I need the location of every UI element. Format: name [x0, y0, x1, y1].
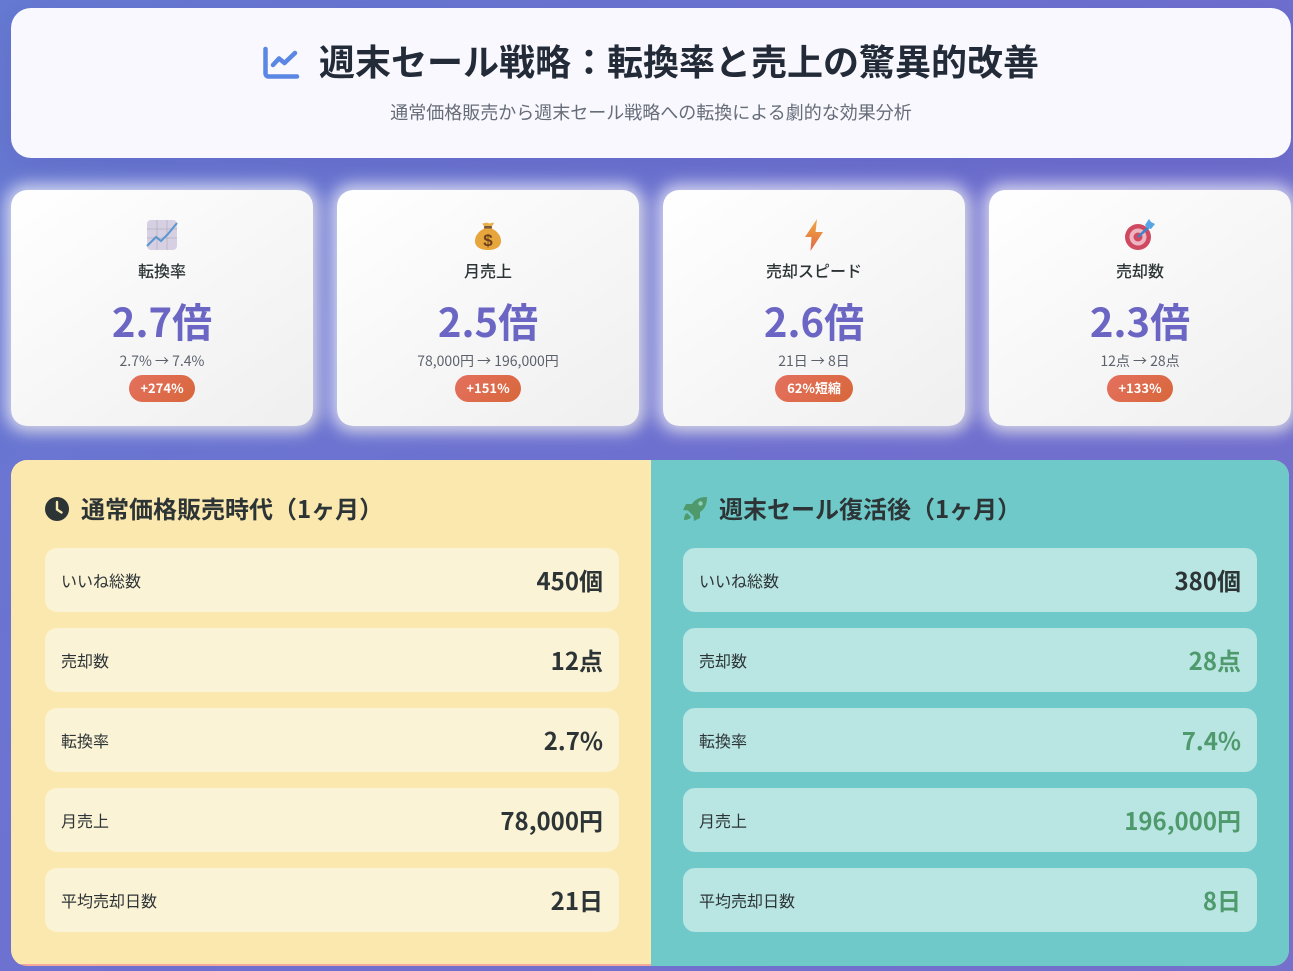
row: likes: いいね総数 [699, 568, 779, 592]
value: 2.5倍 [438, 291, 538, 349]
detail: 21日 → 8日 [778, 351, 850, 371]
row: likes: 380個 [1175, 562, 1241, 597]
icon: money bag: $ [483, 231, 493, 250]
label: 売却数 [1116, 258, 1164, 282]
icon: line chart [263, 46, 300, 79]
badge: 62%短縮 [787, 378, 841, 397]
value: 2.3倍 [1090, 291, 1190, 349]
badge: +274% [140, 378, 184, 397]
value: 2.6倍 [764, 291, 864, 349]
row: conversion rate: 2.7% [544, 722, 603, 757]
badge [775, 375, 853, 402]
row: monthly sales: 78,000円 [500, 802, 603, 837]
value: 2.7倍 [112, 291, 212, 349]
row: average days: 平均売却日数 [699, 888, 795, 912]
KPI card: conversion rate [11, 190, 313, 426]
title: 週末セール戦略：転換率と売上の驚異的改善 [319, 34, 1039, 86]
detail: 78,000円 → 196,000円 [417, 351, 559, 371]
row: likes [683, 548, 1257, 612]
row: conversion rate: 転換率 [699, 728, 747, 752]
icon: money bag [475, 222, 501, 250]
comparison panels [11, 460, 1289, 966]
icon: chart emoji [146, 220, 178, 250]
row: units sold: 12点 [551, 642, 603, 677]
row: average days: 21日 [551, 882, 603, 917]
label: 売却スピード [766, 258, 862, 282]
row: monthly sales: 月売上 [699, 808, 747, 832]
row: units sold [683, 628, 1257, 692]
row: units sold: 売却数 [61, 648, 109, 672]
subtitle: 通常価格販売から週末セール戦略への転換による劇的な効果分析 [390, 99, 912, 125]
row: monthly sales: 月売上 [61, 808, 109, 832]
row: average days [45, 868, 619, 932]
row: average days: 平均売却日数 [61, 888, 157, 912]
row: units sold: 28点 [1189, 642, 1241, 677]
badge [129, 375, 195, 402]
panel: after weekend sale [651, 460, 1289, 966]
panel: regular price era [11, 460, 651, 964]
row: monthly sales [45, 788, 619, 852]
label: 転換率 [138, 258, 186, 282]
row: conversion rate: 7.4% [1182, 722, 1241, 757]
row: likes: いいね総数 [61, 568, 141, 592]
row: conversion rate: 転換率 [61, 728, 109, 752]
header panel [11, 8, 1291, 158]
row: monthly sales [683, 788, 1257, 852]
row: conversion rate [45, 708, 619, 772]
label: 月売上 [464, 258, 512, 282]
badge: +151% [466, 378, 510, 397]
row: average days: 8日 [1203, 882, 1241, 917]
row: units sold: 売却数 [699, 648, 747, 672]
row: monthly sales: 196,000円 [1124, 802, 1241, 837]
KPI card: sales speed [663, 190, 965, 426]
badge [1107, 375, 1173, 402]
icon: rocket [683, 497, 707, 521]
row: conversion rate [683, 708, 1257, 772]
row: average days [683, 868, 1257, 932]
badge [455, 375, 521, 402]
icon: lightning [805, 219, 823, 251]
row: units sold [45, 628, 619, 692]
detail: 12点 → 28点 [1100, 351, 1180, 371]
panel heading: 通常価格販売時代（1ヶ月） [81, 490, 383, 525]
KPI card: monthly sales [337, 190, 639, 426]
icon: target [1125, 219, 1155, 250]
icon: clock [45, 497, 69, 521]
panel heading: 週末セール復活後（1ヶ月） [719, 490, 1021, 525]
KPI card: units sold [989, 190, 1291, 426]
badge: +133% [1118, 378, 1162, 397]
detail: 2.7% → 7.4% [120, 351, 204, 371]
row: likes: 450個 [537, 562, 603, 597]
row: likes [45, 548, 619, 612]
